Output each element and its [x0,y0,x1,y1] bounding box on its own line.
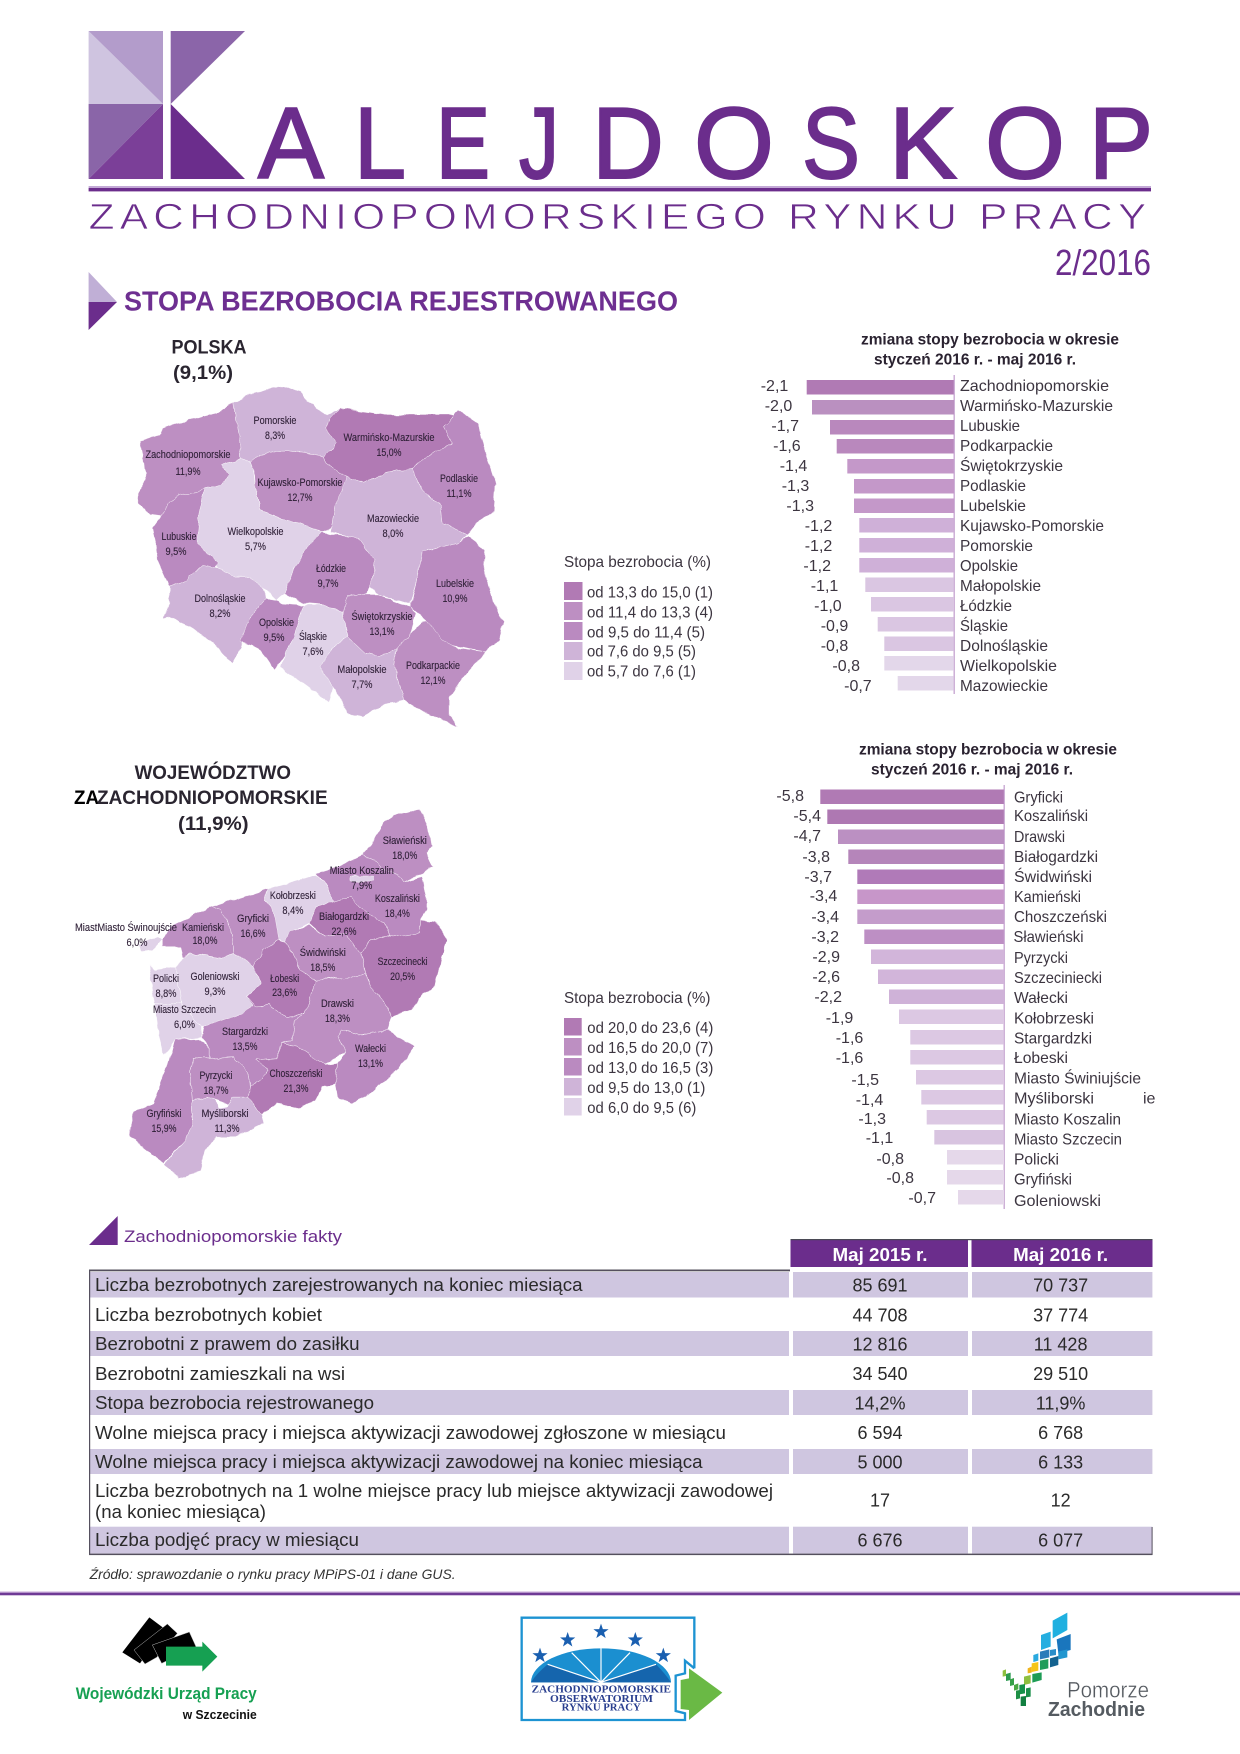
value labels: -1,4 [780,458,807,475]
value labels: -2,0 [765,398,792,415]
section heading: STOPA BEZROBOCIA REJESTROWANEGO [124,286,678,316]
map labels: county rates: 20,5% [390,971,415,983]
map labels: county rates: Sławieński [383,835,427,847]
logo: Pomorze Zachodnie: Zachodnie [1048,1699,1145,1721]
value labels: -0,9 [821,618,848,635]
map labels: county rates: Koszaliński [375,893,420,905]
category labels: Podlaskie [960,478,1026,495]
map: województwo zachodniopomorskie [75,809,447,1178]
value labels: -3,4 [811,909,839,926]
logo: Wojewódzki Urząd Pracy: w Szczecinie [182,1707,257,1722]
category labels: Kujawsko-Pomorskie [960,518,1104,535]
map labels: county rates: 22,6% [332,926,357,938]
legend: Polska: od 9,5 do 11,4 (5) [587,624,705,642]
table values: May 2016: 6 077 [1038,1530,1083,1550]
value labels: -5,4 [793,808,821,825]
bar chart: Polska change by voivodeship [761,332,1119,695]
map labels: county rates: Pyrzycki [200,1070,232,1082]
table row bands [90,1272,1152,1554]
table values: May 2015: 34 540 [852,1364,908,1384]
map labels: county rates: 21,3% [284,1083,309,1095]
legend: zachodniopomorskie: od 9,5 do 13,0 (1) [587,1080,705,1097]
value labels: -5,8 [776,788,804,805]
table header: Maj 2015 r. [832,1245,928,1265]
value labels: -1,2 [805,518,832,535]
map labels: county rates: Goleniowski [190,971,240,983]
masthead logo: kaleidoscope K [89,31,245,179]
map labels: county rates: 18,0% [192,935,218,947]
map labels: voivodeship rates: 9,5% [264,632,285,644]
map labels: county rates: Wałecki [355,1043,386,1055]
map labels: voivodeship rates: 12,7% [288,492,313,504]
section heading: facts: Zachodniopomorskie fakty [124,1227,343,1246]
map labels: voivodeship rates: 9,5% [166,546,187,558]
map labels: county rates: Gryfiński [146,1108,182,1120]
legend: Polska [564,554,713,680]
legend: Polska: od 5,7 do 7,6 (1) [587,664,696,680]
category labels: Podkarpackie [960,438,1053,455]
value labels: -1,4 [856,1092,883,1109]
table values: May 2016: 11,9% [1036,1394,1085,1414]
section marker arrow [89,272,117,330]
table row labels [95,1275,773,1550]
legend: zachodniopomorskie: od 6,0 do 9,5 (6) [587,1100,696,1117]
value labels: -1,6 [836,1030,863,1047]
value labels: -3,8 [802,849,830,866]
map labels: county rates: MiastMiasto Świnoujście [75,921,177,934]
category labels: Kamieński [1014,889,1081,906]
category labels: Myśliborski [1014,1090,1094,1108]
logo: Wojewódzki Urząd Pracy: Wojewódzki Urząd Pracy [76,1684,257,1703]
map labels: county rates: 23,6% [272,987,297,999]
title: ALEJDOSKOP: A [258,88,325,200]
table values: May 2016: 11 428 [1034,1334,1087,1354]
category labels: Lubuskie [960,418,1020,435]
map labels: county rates: Świdwiński [300,946,346,959]
logo: Pomorze Zachodnie [1003,1613,1149,1721]
value labels: -1,2 [805,538,832,555]
table values: May 2015: 85 691 [852,1276,908,1296]
map labels: voivodeship rates: Śląskie [299,630,327,643]
category labels: Wielkopolskie [960,658,1057,675]
table values: May 2016: 29 510 [1033,1364,1088,1384]
legend: Polska: od 13,3 do 15,0 (1) [587,584,713,602]
map labels: county rates: Szczecinecki [378,956,428,968]
title: ALEJDOSKOP: S [802,88,860,200]
title: ALEJDOSKOP: O [694,88,774,200]
map labels: voivodeship rates: Lubelskie [436,578,474,590]
map labels: county rates: Białogardzki [319,911,369,923]
map labels: voivodeship rates: Dolnośląskie [194,593,246,605]
table header [790,1239,1152,1267]
legend: Polska: od 7,6 do 9,5 (5) [587,644,696,660]
icon: frame, dome, stars and arrow [522,1618,722,1720]
map labels: county rates: 18,7% [204,1085,229,1097]
map labels: county rates: 18,5% [310,962,335,974]
category labels: Miasto Świniujście [1014,1068,1141,1088]
footer rule [0,1592,1240,1595]
chart title [859,742,1117,778]
table values: May 2016: 6 133 [1038,1452,1083,1472]
subtitle: ZACHODNIOPOMORSKIEGO RYNKU PRACY [89,196,1152,237]
logo: Zachodniopomorskie Obserwatorium Rynku Pracy: OBSERWATORIUM [550,1694,653,1705]
heading: województwo zachodniopomorskie: (11,9%) [178,814,249,835]
category labels: Pyrzycki [1014,950,1068,967]
map labels: county rates: 6,0% [174,1019,195,1031]
category labels: Gryficki [1014,790,1063,806]
map labels: county rates: Miasto Koszalin [330,865,394,877]
value labels: -1,1 [811,578,838,595]
category labels: Łobeski [1014,1050,1068,1067]
map labels: county rates: 7,9% [351,880,372,892]
value labels: -1,3 [858,1111,886,1128]
map labels: county rates: 8,8% [156,988,177,1000]
category labels: Lubelskie [960,498,1026,515]
map labels: county rates: 11,3% [214,1123,240,1135]
map labels: voivodeship rates: Wielkopolskie [228,526,284,538]
category labels: Warmińsko-Mazurskie [960,398,1113,415]
map: Polska [138,386,503,727]
map labels: county rates: Myśliborski [202,1108,248,1120]
table values: May 2016: 37 774 [1033,1306,1088,1326]
legend: zachodniopomorskie [564,990,713,1117]
table values: May 2015: 17 [870,1490,890,1510]
map labels: voivodeship rates: Warmińsko-Mazurskie [344,432,434,444]
category labels: Wałecki [1014,990,1068,1007]
category labels: Choszczeński [1014,909,1107,926]
legend: Polska: Stopa bezrobocia (%) [564,554,711,571]
value labels: -1,6 [836,1050,863,1067]
category labels: Śląskie [960,616,1008,635]
category labels: Opolskie [960,558,1018,575]
masthead rule [89,186,1151,191]
table: facts [89,1239,1153,1555]
map labels: voivodeship rates: Pomorskie [254,415,296,427]
value labels: -1,6 [773,438,801,455]
map labels: county rates: 16,6% [240,928,266,940]
source note: Źródło: sprawozdanie o rynku pracy MPiPS-01 i dane GUS. [89,1566,456,1582]
table row labels: Liczba bezrobotnych kobiet [95,1305,322,1325]
map labels: county rates: 13,5% [232,1041,258,1053]
category labels: Gryfiński [1014,1172,1072,1188]
category labels: Świdwiński [1014,867,1092,886]
map labels: voivodeship rates: Mazowieckie [367,513,419,525]
category labels: Kołobrzeski [1014,1010,1094,1028]
legend: zachodniopomorskie: od 13,0 do 16,5 (3) [587,1060,713,1077]
map labels: county rates: 8,4% [282,905,304,917]
title: ALEJDOSKOP: D [592,88,664,200]
value labels: -0,8 [886,1170,914,1187]
section marker triangle [89,1216,118,1245]
table values: May 2015: 5 000 [857,1452,903,1472]
category labels: Policki [1014,1152,1059,1168]
table border [89,1270,1153,1555]
map labels: voivodeship rates: Lubuskie [162,531,196,543]
category labels: Dolnośląskie [960,638,1048,655]
table row labels: Wolne miejsca pracy i miejsca aktywizacji zawodowej na koniec miesiąca [95,1452,704,1472]
logo: Pomorze Zachodnie: Pomorze [1067,1678,1149,1703]
category labels: Koszaliński [1014,808,1088,825]
category labels: Goleniowski [1014,1193,1101,1210]
value labels: -2,9 [812,949,840,966]
title: ALEJDOSKOP: K [889,88,957,200]
heading: województwo zachodniopomorskie: ZACHODNIOPOMORSKIE [97,788,328,809]
map labels: county rates: Kołobrzeski [270,890,316,902]
category labels: Sławieński [1014,929,1084,946]
value labels [761,378,872,695]
title: ALEJDOSKOP: J [519,88,559,200]
map labels: voivodeship rates: 5,7% [245,541,266,553]
bars [807,380,954,690]
map labels: voivodeship rates: 11,1% [446,488,472,500]
map labels: voivodeship rates: 7,6% [302,646,324,658]
chart title: styczeń 2016 r. - maj 2016 r. [871,762,1073,778]
category labels: Łódzkie [960,598,1012,615]
value labels: -1,5 [851,1072,879,1089]
axis [1004,785,1005,1209]
title: ALEJDOSKOP: E [436,88,490,200]
value labels: -1,7 [771,418,799,435]
map labels: county rates: Policki [153,973,179,985]
value labels: -1,3 [782,478,809,495]
map labels: county rates: Drawski [321,998,354,1010]
map labels: county rates: Stargardzki [222,1026,268,1038]
map labels: county rates: Łobeski [270,973,299,985]
table values: May 2015: 12 816 [852,1334,908,1354]
category labels: Pomorskie [960,538,1033,555]
title: ALEJDOSKOP: L [354,88,406,200]
map labels: county rates [75,835,428,1135]
map labels: voivodeship rates: 12,1% [420,675,446,687]
value labels: -0,8 [821,638,848,655]
heading: Polska: (9,1%) [173,363,233,384]
table values: May 2016: 6 768 [1038,1423,1083,1443]
logo: Zachodniopomorskie Obserwatorium Rynku Pracy [522,1618,722,1720]
value labels: -3,2 [811,929,839,946]
value labels: -0,7 [908,1190,936,1207]
value labels: -1,1 [866,1130,893,1147]
map labels: voivodeship rates [146,415,478,691]
map labels: county rates: 18,4% [385,908,410,920]
value labels [776,788,936,1207]
chart title: styczeń 2016 r. - maj 2016 r. [874,352,1076,368]
map labels: county rates: Kamieński [182,922,224,934]
map labels: county rates: 9,3% [204,986,226,998]
logo: Wojewódzki Urząd Pracy [76,1617,257,1722]
title: ALEJDOSKOP: P [1089,88,1153,200]
logo: Zachodniopomorskie Obserwatorium Rynku Pracy: ZACHODNIOPOMORSKIE [532,1685,671,1696]
value labels: -0,8 [876,1151,904,1168]
value labels: -2,1 [761,378,788,395]
table values: May 2015: 6 594 [857,1423,903,1443]
map labels: county rates: Gryficki [237,913,269,925]
table row labels: Liczba podjęć pracy w miesiącu [95,1530,359,1550]
map labels: county rates: 13,1% [358,1058,383,1070]
icon: cards and arrow [122,1617,217,1672]
map labels: voivodeship rates: Podkarpackie [406,660,460,672]
category labels: Małopolskie [960,578,1041,595]
heading: województwo zachodniopomorskie: ZA [74,788,99,809]
category labels: Miasto Szczecin [1014,1132,1122,1148]
chart title: zmiana stopy bezrobocia w okresie [861,332,1119,348]
table header: Maj 2016 r. [1013,1245,1108,1265]
value labels: -0,7 [844,678,872,695]
map labels: voivodeship rates: 8,0% [382,528,404,540]
map labels: voivodeship rates: Kujawsko-Pomorskie [258,477,342,489]
map labels: voivodeship rates: Opolskie [259,617,294,629]
value labels: -4,7 [793,828,821,845]
value labels: -0,8 [832,658,860,675]
map labels: voivodeship rates: Podlaskie [440,473,478,485]
value labels: -1,2 [803,558,831,575]
axis [954,375,955,694]
logo: Zachodniopomorskie Obserwatorium Rynku Pracy: RYNKU PRACY [562,1703,641,1714]
map labels: voivodeship rates: 8,2% [210,608,231,620]
category labels: Szczeciniecki [1014,970,1102,987]
value labels: -1,3 [786,498,814,515]
map labels: voivodeship rates: Świętokrzyskie [352,610,412,623]
map labels: voivodeship rates: 15,0% [376,447,402,459]
map labels: county rates: 6,0% [126,937,148,949]
category labels [960,378,1113,695]
map labels: voivodeship rates: 10,9% [442,593,468,605]
legend: zachodniopomorskie: od 20,0 do 23,6 (4) [587,1020,713,1037]
map labels: voivodeship rates: 11,9% [176,466,201,478]
value labels: -1,0 [814,598,842,615]
table row labels: Liczba bezrobotnych na 1 wolne miejsce pracy lub miejsce aktywizacji zawodowej [95,1481,773,1501]
icon: pixel check mark [1003,1613,1071,1706]
value labels: -3,4 [810,888,837,905]
map labels: voivodeship rates: Łódzkie [316,563,346,575]
table values: May 2016: 12 [1051,1490,1071,1510]
map regions: voivodeships [138,386,503,727]
table row labels: Stopa bezrobocia rejestrowanego [95,1393,374,1413]
category labels: Miasto Koszalin [1014,1112,1121,1128]
map labels: voivodeship rates: 8,3% [265,430,285,442]
category labels: ie [1143,1090,1156,1108]
map labels: voivodeship rates: 7,7% [352,679,373,691]
chart title: zmiana stopy bezrobocia w okresie [859,742,1117,758]
map labels: voivodeship rates: 13,1% [370,626,395,638]
table values: May 2016: 70 737 [1033,1276,1088,1296]
map labels: county rates: Miasto Szczecin [153,1004,216,1016]
bar chart: change by county [776,742,1156,1210]
title: ALEJDOSKOP: O [985,88,1065,200]
value labels: -2,2 [814,989,842,1006]
table values: May 2015: 44 708 [852,1306,908,1326]
table values: May 2016 [1033,1276,1088,1550]
map labels: voivodeship rates: Małopolskie [338,664,386,676]
table values: May 2015: 14,2% [854,1394,906,1414]
map labels: county rates: 18,0% [392,850,417,862]
legend: zachodniopomorskie: od 16,5 do 20,0 (7) [587,1040,713,1057]
category labels [1014,790,1156,1210]
table row labels: Bezrobotni zamieszkali na wsi [95,1364,345,1384]
map regions: counties [129,809,447,1178]
table row labels: Liczba bezrobotnych zarejestrowanych na koniec miesiąca [95,1275,584,1295]
heading: województwo zachodniopomorskie [74,762,328,835]
heading: Polska: POLSKA [172,338,247,358]
value labels: -1,9 [826,1010,853,1027]
value labels: -2,6 [812,969,840,986]
category labels: Drawski [1014,829,1065,846]
category labels: Stargardzki [1014,1030,1092,1048]
map labels: county rates: Choszczeński [270,1068,322,1080]
map labels: county rates: 18,3% [325,1013,350,1025]
chart title [861,332,1119,368]
table row labels: (na koniec miesiąca) [95,1502,266,1522]
heading: województwo zachodniopomorskie: WOJEWÓDZTWO [135,762,291,784]
table values: May 2015: 6 676 [857,1530,903,1550]
legend: Polska: od 11,4 do 13,3 (4) [587,604,713,622]
table row labels: Wolne miejsca pracy i miejsca aktywizacji zawodowej zgłoszone w miesiącu [95,1423,726,1443]
category labels: Zachodniopomorskie [960,378,1109,395]
category labels: Białogardzki [1014,849,1098,866]
issue number: 2/2016 [1055,242,1151,283]
table row labels: Bezrobotni z prawem do zasiłku [95,1334,360,1354]
value labels: -3,7 [804,869,832,886]
legend: zachodniopomorskie: Stopa bezrobocia (%) [564,990,710,1007]
category labels: Świętokrzyskie [960,456,1063,475]
table values: May 2015 [852,1276,908,1550]
map labels: voivodeship rates: Zachodniopomorskie [146,449,230,461]
map labels: voivodeship rates: 9,7% [318,578,339,590]
bars [820,790,1004,1204]
heading: Polska [172,338,247,384]
map labels: county rates: 15,9% [152,1123,177,1135]
category labels: Mazowieckie [960,678,1048,695]
